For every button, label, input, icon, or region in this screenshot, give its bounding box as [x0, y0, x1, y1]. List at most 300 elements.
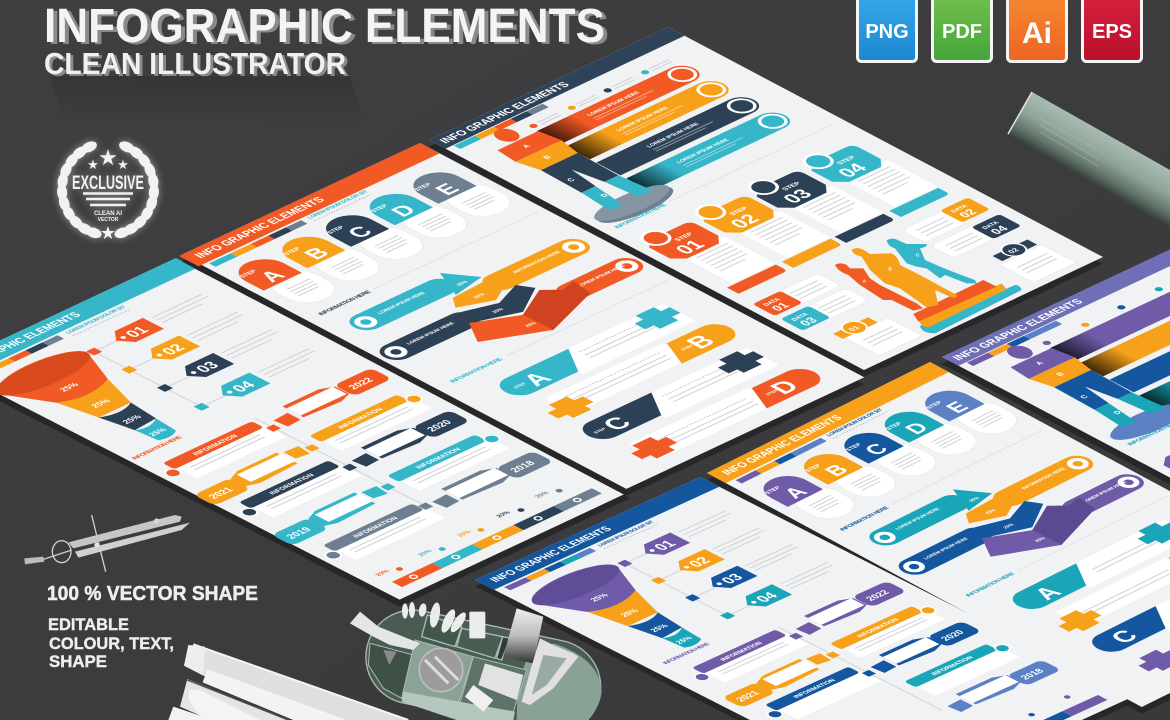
person figure	[973, 331, 1170, 445]
sheet paper	[942, 244, 1170, 587]
step E	[915, 383, 1026, 441]
block information grey	[313, 500, 451, 566]
funnel chart	[519, 558, 735, 664]
information heading 2: INFORMATION HERE	[448, 357, 505, 384]
step 04: 04	[833, 161, 872, 180]
colour bar	[736, 438, 827, 483]
step C: STEP	[845, 443, 864, 452]
person figure: D	[599, 193, 610, 199]
block information yellow	[830, 602, 950, 659]
metal disc	[419, 648, 463, 692]
sheet shadow	[707, 369, 1170, 714]
sheet title: INFO GRAPHIC ELEMENTS	[192, 195, 328, 260]
funnel chart: 25%	[89, 397, 113, 409]
person figure: A	[521, 143, 532, 149]
tall block	[503, 608, 543, 663]
row B	[1055, 534, 1170, 627]
badge stars: ★	[100, 223, 116, 243]
icon: PDF tile: PDF	[942, 21, 982, 43]
step E: E	[941, 399, 974, 416]
data 04	[931, 214, 1021, 258]
text: editable list	[48, 615, 174, 671]
block information yellow: INFORMATION	[855, 617, 901, 639]
sheet paper	[475, 477, 1132, 720]
main subtitle: CLEAN ILLUSTRATOR	[44, 46, 346, 81]
step D	[875, 404, 986, 462]
block information purple: INFORMATION	[719, 641, 765, 662]
stacked arrow chart: 25%	[984, 508, 999, 515]
person letters: C	[916, 253, 920, 259]
data 03: DATA	[791, 312, 811, 322]
tag 01	[635, 509, 742, 559]
timeline spine	[617, 550, 757, 619]
row D: D	[764, 377, 806, 398]
sheet: orange steps and arrows	[175, 143, 871, 496]
block information blue: INFORMATION	[792, 678, 838, 699]
percent bar	[971, 687, 1108, 720]
step C	[315, 207, 433, 267]
header band	[179, 143, 440, 266]
stacked arrow chart: 25%	[455, 280, 470, 287]
block 2020	[862, 619, 982, 675]
pill teal: LOREM IPSUM HERE	[894, 507, 942, 531]
step C: STEP	[326, 225, 346, 235]
block information yellow	[309, 390, 438, 452]
person figure: D	[1112, 410, 1124, 416]
badge small text	[94, 211, 122, 223]
step D: STEP	[885, 422, 904, 431]
sheet title: INFO GRAPHIC ELEMENTS	[951, 298, 1086, 362]
funnel chart: 25%	[648, 623, 670, 633]
sheet paper	[0, 258, 629, 600]
information heading: INFORMATION HERE	[614, 203, 669, 230]
percent bar: 20%	[495, 510, 513, 519]
person figure	[460, 114, 684, 228]
pill dark	[373, 309, 487, 364]
sheet shadow	[942, 251, 1170, 594]
subtitle: LOREM IPSUM DOLOR SIT	[597, 520, 657, 548]
header band	[942, 244, 1170, 366]
step 04: STEP	[836, 155, 858, 166]
person teal	[887, 239, 977, 283]
step 03: 03	[778, 187, 818, 206]
icon: PNG tile: PNG	[865, 21, 909, 43]
tag 01: 01	[122, 325, 153, 340]
funnel chart: 25%	[588, 592, 610, 603]
roll 1 end	[184, 645, 205, 676]
sheet shadow	[429, 34, 1103, 377]
clips	[402, 602, 485, 638]
row B	[544, 319, 744, 414]
block information teal: INFORMATION	[415, 447, 463, 470]
puzzle orange	[624, 433, 683, 462]
step D: D	[900, 420, 934, 437]
icon: PDF tile	[932, 0, 992, 62]
rolled blueprints	[168, 644, 408, 720]
step 02: STEP	[728, 206, 751, 217]
step E: E	[429, 180, 465, 198]
main title: INFOGRAPHIC ELEMENTS	[48, 2, 609, 55]
data 04: DATA	[981, 221, 1002, 230]
pill teal	[863, 492, 976, 549]
step A: STEP	[238, 269, 259, 279]
sheet shadow	[182, 150, 864, 496]
tag 03: 03	[192, 360, 224, 375]
data 04: 04	[987, 224, 1012, 236]
block 2022	[786, 580, 907, 636]
pill purple	[1056, 471, 1150, 519]
ribbon dark: LOREM IPSUM HERE	[646, 122, 701, 149]
stacked arrow chart: 25%	[491, 307, 506, 314]
block information teal: INFORMATION	[930, 655, 976, 677]
subtitle: LOREM IPSUM DOLOR SIT	[306, 190, 371, 220]
information heading: INFORMATION HERE	[130, 435, 184, 461]
funnel chart: 25%	[618, 608, 641, 618]
step 04	[796, 138, 951, 217]
rolled tube	[1008, 92, 1170, 228]
row D: STEP	[764, 389, 779, 396]
step E: STEP	[413, 182, 434, 192]
ribbon teal	[1139, 326, 1170, 408]
block 2022: 2022	[347, 376, 377, 391]
step D: STEP	[369, 204, 390, 214]
data 01	[753, 273, 841, 316]
stapler	[522, 638, 578, 705]
block 2021: 2021	[207, 486, 237, 501]
stacked arrow chart: 25%	[968, 496, 982, 503]
roll 4	[168, 707, 213, 720]
tag 03	[703, 542, 809, 592]
row A	[491, 304, 696, 402]
stacked arrow chart	[907, 461, 1116, 569]
badge word: EXCLUSIVE	[72, 173, 144, 194]
compartments top	[422, 615, 510, 660]
person figure: B	[541, 154, 553, 160]
colour bar	[0, 335, 64, 381]
tray with tools	[350, 601, 609, 720]
wreath left	[56, 139, 103, 240]
funnel chart: 25%	[57, 381, 81, 393]
block 2018	[423, 448, 554, 511]
step B: STEP	[804, 464, 823, 473]
wreath right	[113, 139, 160, 240]
white square	[478, 663, 523, 700]
person letters	[863, 253, 920, 285]
step C: C	[860, 441, 894, 459]
pill teal	[342, 275, 464, 334]
step A: STEP	[764, 486, 783, 495]
data 01: 01	[768, 301, 793, 313]
colour bar	[209, 220, 307, 267]
block 2022: 2022	[864, 589, 892, 603]
data 03	[781, 288, 869, 331]
step 01	[633, 215, 788, 294]
text: editable list: EDITABLE	[48, 615, 129, 634]
stacked arrow chart: 25%	[1002, 522, 1017, 530]
sheet title: INFO GRAPHIC ELEMENTS	[438, 81, 573, 145]
tag 04	[212, 346, 326, 401]
white card	[465, 685, 493, 712]
tag 04: 04	[229, 379, 260, 394]
people on podium	[835, 239, 1022, 333]
information heading 1: INFORMATION HERE	[317, 290, 373, 316]
tag 01	[106, 292, 220, 346]
step A	[753, 468, 864, 526]
icon: Ai tile: Ai	[1022, 17, 1052, 50]
icon: PNG tile	[858, 0, 916, 62]
icon: compass	[24, 515, 190, 572]
icon: EPS tile	[1082, 0, 1142, 62]
pill yellow: INFORMATION HERE	[512, 250, 563, 274]
puzzle dark	[711, 347, 770, 377]
badge stars: ★	[87, 157, 99, 172]
pill blue: LOREM IPSUM HERE	[923, 537, 970, 561]
roll 1	[184, 644, 408, 720]
icon: Ai tile	[1008, 0, 1066, 62]
block 2021	[719, 647, 848, 708]
row A	[1005, 519, 1170, 615]
block 2018: 2018	[508, 459, 539, 474]
tray right end	[517, 643, 602, 720]
person orange	[835, 263, 923, 311]
sheet paper	[707, 362, 1170, 707]
title long shadow	[50, 76, 365, 125]
bottom strip	[402, 692, 515, 720]
row C	[1084, 562, 1170, 658]
block 2021	[190, 440, 328, 506]
ribbon teal: LOREM IPSUM HERE	[676, 138, 731, 165]
text: vector shape heading: 100 % VECTOR SHAPE	[47, 583, 258, 605]
funnel chart: 25%	[120, 413, 144, 425]
timeline spine	[86, 337, 233, 411]
step C	[834, 425, 946, 483]
main title: INFOGRAPHIC ELEMENTS	[44, 0, 605, 53]
step 01: 01	[671, 237, 710, 257]
information heading: INFORMATION HERE	[662, 642, 712, 665]
stacked arrow chart: 25%	[524, 321, 539, 328]
percent bar: 20%	[534, 490, 551, 499]
text: editable list: COLOUR, TEXT,	[49, 634, 174, 653]
information heading 2: INFORMATION HERE	[965, 572, 1017, 598]
step D: D	[385, 201, 422, 220]
block information dark: INFORMATION	[268, 473, 316, 496]
data 02: DATA	[950, 204, 970, 214]
tag 04	[737, 560, 844, 610]
row A: A	[517, 369, 558, 390]
step B: B	[298, 244, 335, 263]
block 2020: 2020	[425, 419, 455, 433]
sheet: teal funnel and timeline	[0, 258, 637, 608]
tag 02: 02	[158, 342, 189, 357]
step A	[228, 251, 345, 310]
pill orange	[549, 254, 650, 303]
row B: STEP	[680, 344, 694, 351]
ribbon orange	[537, 62, 707, 144]
data 03: 03	[796, 315, 821, 328]
pill purple: LOREM IPSUM HERE	[1081, 480, 1129, 504]
sheet title: INFO GRAPHIC ELEMENTS	[720, 414, 845, 477]
step A: A	[779, 484, 813, 502]
icon: EPS tile: EPS	[1092, 21, 1132, 43]
percent bar: 30%	[456, 529, 474, 538]
person figure: B	[1055, 371, 1066, 377]
step E: STEP	[926, 401, 944, 410]
sheet: dark people and steps	[422, 27, 1110, 377]
puzzle yellow	[540, 392, 600, 422]
row C: C	[1105, 627, 1145, 647]
main subtitle: CLEAN ILLUSTRATOR	[47, 48, 349, 83]
step B	[272, 229, 389, 288]
row A: STEP	[512, 382, 527, 389]
badge 02: 02	[1006, 247, 1021, 255]
block information teal	[904, 640, 1025, 696]
person figure: A	[1034, 360, 1046, 366]
colour bar	[454, 104, 549, 149]
compartment right	[460, 657, 527, 712]
block 2020	[343, 408, 470, 469]
funnel chart	[0, 344, 212, 458]
roll 3	[180, 679, 287, 720]
step B: B	[820, 462, 854, 479]
block 2018: 2018	[1018, 668, 1047, 681]
step B	[794, 446, 905, 504]
badge 01: 01	[846, 324, 863, 332]
step 03: STEP	[781, 181, 803, 192]
percent bar	[370, 478, 602, 588]
block information grey: INFORMATION	[352, 516, 400, 539]
percent bar: 20%	[374, 569, 392, 577]
block information orange: INFORMATION	[192, 434, 240, 457]
block 2022	[263, 366, 392, 428]
tag 03: 03	[718, 572, 747, 586]
ribbon teal	[626, 109, 797, 191]
sheet title: INFO GRAPHIC ELEMENTS	[488, 525, 615, 584]
block information orange	[152, 417, 292, 484]
step 01: STEP	[673, 232, 696, 243]
person letters: A	[863, 279, 867, 285]
pill yellow: INFORMATION HERE	[1020, 467, 1068, 491]
podium orange layer	[913, 280, 997, 322]
block 2018	[939, 657, 1061, 715]
tray body	[357, 601, 609, 720]
compartment left lower	[368, 643, 413, 698]
pill blue	[892, 524, 998, 578]
central timeline line	[778, 627, 942, 710]
pill dark: LOREM IPSUM HERE	[405, 321, 457, 346]
step D	[359, 186, 477, 245]
header band	[707, 362, 949, 483]
legend dots	[1040, 286, 1166, 346]
central timeline line	[255, 418, 426, 506]
step E	[403, 164, 520, 224]
person letters: B	[888, 267, 892, 273]
header band	[429, 27, 684, 149]
stacked arrow chart: 25%	[1034, 536, 1048, 543]
step C: C	[342, 223, 378, 241]
block 2019	[268, 480, 406, 546]
badge 02	[983, 236, 1076, 283]
row C: STEP	[592, 427, 607, 434]
stacked arrow chart: 25%	[473, 292, 487, 300]
tag 02	[142, 310, 255, 364]
sheet: blue funnel and timeline	[468, 477, 1139, 720]
row A: A	[1028, 583, 1068, 604]
puzzle yellow	[1052, 606, 1108, 635]
puzzle teal	[1130, 519, 1170, 548]
text: editable list: SHAPE	[49, 652, 107, 671]
tag 02: 02	[686, 555, 715, 570]
scissors	[350, 612, 420, 665]
sheet shadow	[475, 483, 1132, 720]
ribbon dark	[596, 94, 766, 175]
colour bar	[967, 321, 1062, 366]
sheet: purple people and steps	[935, 244, 1170, 594]
pill yellow	[476, 235, 597, 294]
person yellow	[852, 248, 957, 307]
badge 01	[828, 310, 921, 357]
badge stars: ★	[98, 145, 118, 170]
sheet shadow	[0, 265, 630, 607]
header band	[0, 258, 196, 381]
stacked arrow chart	[391, 244, 613, 354]
tag 04: 04	[753, 590, 783, 605]
block 2021: 2021	[734, 689, 763, 703]
row C	[575, 348, 779, 446]
row C: C	[597, 413, 638, 434]
person figure: C	[1078, 394, 1090, 400]
percent bar: 20%	[417, 549, 434, 557]
sheet paper	[182, 143, 864, 489]
badge stars: ★	[117, 157, 129, 172]
badge small text: CLEAN AI	[94, 211, 122, 217]
compartment main	[402, 640, 473, 703]
row B: B	[681, 332, 722, 352]
row D	[629, 364, 829, 459]
data 02	[900, 198, 992, 243]
ribbon yellow	[1079, 295, 1170, 376]
ribbon orange: LOREM IPSUM HERE	[586, 91, 642, 117]
step B: STEP	[282, 246, 302, 257]
pill teal: LOREM IPSUM HERE	[376, 291, 428, 315]
pill yellow	[987, 452, 1100, 510]
data 02: 02	[956, 207, 980, 219]
step tab purple	[1156, 439, 1170, 479]
tag 02	[670, 526, 776, 575]
block information yellow: INFORMATION	[337, 407, 385, 430]
funnel chart: 25%	[673, 635, 695, 645]
colour bar	[504, 548, 596, 590]
funnel chart: 25%	[147, 427, 169, 437]
exclusive badge	[56, 139, 160, 243]
step 02	[688, 189, 843, 268]
tag 01: 01	[651, 539, 680, 553]
podium teal layer	[920, 285, 1022, 333]
badge small text: VECTOR	[98, 217, 119, 223]
block information purple	[683, 626, 814, 688]
sheet: yellow steps and arrows	[700, 362, 1170, 714]
header band	[475, 477, 719, 590]
puzzle purple	[1131, 646, 1170, 675]
subtitle: LOREM IPSUM DOLOR SIT	[65, 305, 129, 335]
podium yellow layer	[919, 283, 1007, 327]
sheet paper	[429, 27, 1103, 370]
tag 03	[176, 327, 289, 381]
step 02: 02	[726, 212, 765, 231]
block information dark	[229, 457, 368, 523]
block 2019: 2019	[284, 526, 315, 541]
puzzle teal	[627, 303, 687, 333]
block information blue	[755, 663, 886, 720]
